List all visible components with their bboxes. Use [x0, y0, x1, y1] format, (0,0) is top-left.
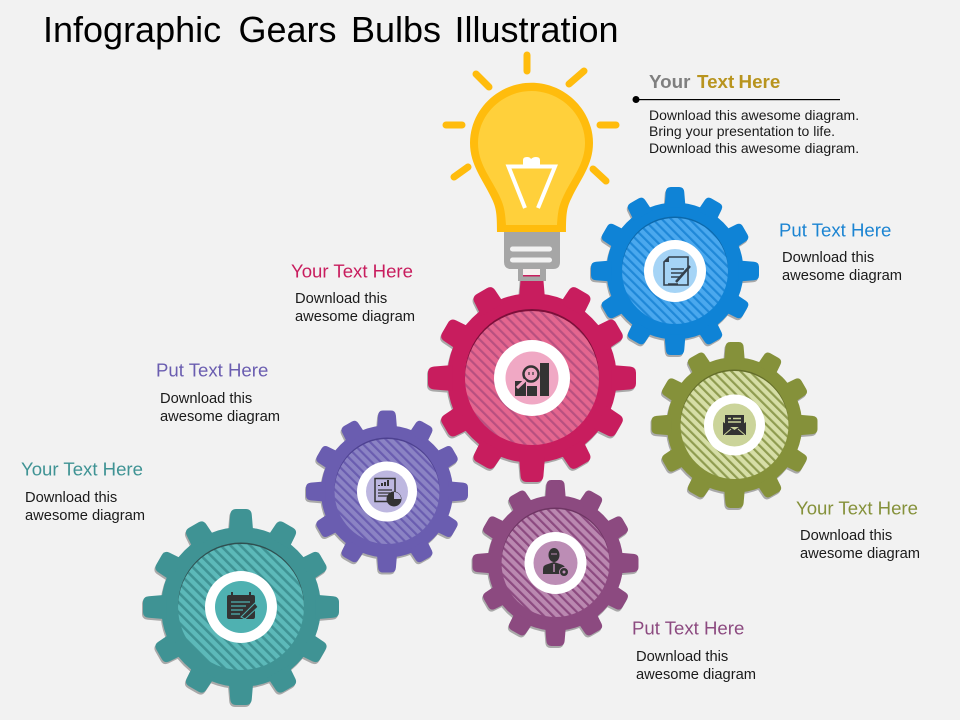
text block: pink gear label: Download this	[295, 291, 387, 307]
text block: blue gear label	[779, 220, 902, 284]
text block: teal gear label: awesome diagram	[25, 508, 145, 524]
bulb rays	[446, 55, 616, 181]
text block: teal gear label: Your Text Here	[21, 458, 143, 480]
icon: report with pie chart	[375, 478, 402, 506]
text block: olive gear label: Your Text Here	[796, 498, 918, 518]
callout body: Download this awesome diagram.	[649, 107, 859, 123]
filament cap	[523, 157, 540, 165]
text block: olive gear label: Download this	[800, 528, 892, 544]
bulb socket	[518, 269, 546, 281]
panel: olive gear	[650, 342, 818, 510]
callout leader line	[632, 96, 840, 103]
text block: blue gear label: awesome diagram	[782, 268, 902, 284]
text block: olive gear label: awesome diagram	[800, 546, 920, 562]
bulb glass outer	[470, 83, 593, 232]
icon: businessman	[543, 548, 568, 576]
panel: pink gear	[427, 274, 636, 484]
text block: blue gear label: Download this	[782, 250, 874, 266]
text block: top callout	[632, 71, 859, 156]
title: Illustration	[454, 9, 619, 50]
text block: teal gear label: Download this	[25, 490, 117, 506]
icon: chart with magnifier	[515, 363, 549, 396]
title: Bulbs	[351, 9, 441, 50]
text block: plum gear label: Download this	[636, 649, 728, 665]
text block: purple gear label: awesome diagram	[160, 409, 280, 425]
callout heading: Your	[649, 71, 691, 92]
panel: plum gear	[472, 480, 638, 648]
text block: purple gear label	[156, 360, 280, 425]
bulb glass inner	[478, 91, 585, 225]
panel: purple gear	[305, 410, 468, 574]
icon: calendar with pen	[227, 592, 258, 619]
callout heading: Text	[697, 71, 735, 92]
text block: pink gear label	[291, 260, 415, 325]
icon: document with pen	[664, 257, 690, 285]
bulb base	[504, 232, 560, 269]
text block: olive gear label	[796, 498, 920, 562]
callout body: Bring your presentation to life.	[649, 123, 835, 139]
text block: pink gear label: awesome diagram	[295, 309, 415, 325]
text block: teal gear label	[21, 458, 145, 524]
panel: blue gear	[590, 187, 759, 357]
icon: open envelope	[723, 415, 746, 435]
callout body: Download this awesome diagram.	[649, 140, 859, 156]
bulb filament	[508, 166, 555, 208]
title: Gears	[238, 9, 337, 50]
text block: purple gear label: Put Text Here	[156, 360, 268, 380]
title: Infographic	[43, 9, 221, 50]
text block: plum gear label: Put Text Here	[632, 618, 744, 638]
text block: plum gear label: awesome diagram	[636, 667, 756, 683]
icon: light bulb	[446, 55, 616, 269]
panel: teal gear	[142, 509, 339, 707]
text block: blue gear label: Put Text Here	[779, 220, 891, 240]
text block: pink gear label: Your Text Here	[291, 260, 413, 282]
callout heading: Here	[738, 71, 780, 92]
text block: plum gear label	[632, 618, 756, 683]
text block: purple gear label: Download this	[160, 391, 252, 407]
